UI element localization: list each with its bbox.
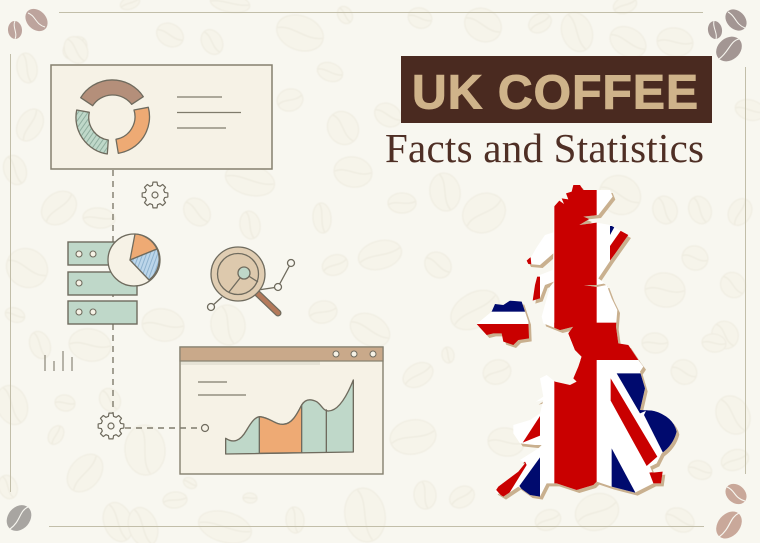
connector end node [202, 424, 208, 432]
dashboard panel with donut chart [51, 65, 272, 169]
horizontal dashed connector [125, 427, 201, 429]
vertical dashed connector [112, 170, 114, 418]
window control dots [333, 351, 376, 357]
map shadow [479, 188, 679, 500]
area chart [226, 380, 353, 454]
subtitle: Facts and Statistics: Facts and Statistics [385, 125, 704, 171]
pie chart [108, 234, 160, 286]
server stack [68, 242, 137, 324]
panel text lines [177, 97, 241, 128]
map: United Kingdom with Union Jack flag [476, 185, 680, 500]
Northern Ireland flag fill [476, 300, 529, 345]
donut chart [76, 80, 150, 154]
window text lines [198, 382, 246, 395]
icon: gear [142, 182, 168, 208]
title banner: UK COFFEE: UK COFFEE [412, 66, 698, 120]
icon: coffee beans top left [7, 4, 52, 40]
icon: coffee beans top right [707, 5, 751, 66]
icon: coffee bean bottom left [2, 500, 36, 536]
small vertical bars [45, 351, 72, 371]
icon: lower gear [98, 413, 124, 439]
browser window panel with area chart [180, 347, 383, 474]
Great Britain flag fill [496, 185, 677, 496]
icon: coffee beans bottom right [711, 480, 751, 543]
magnifier with network nodes [208, 247, 294, 313]
